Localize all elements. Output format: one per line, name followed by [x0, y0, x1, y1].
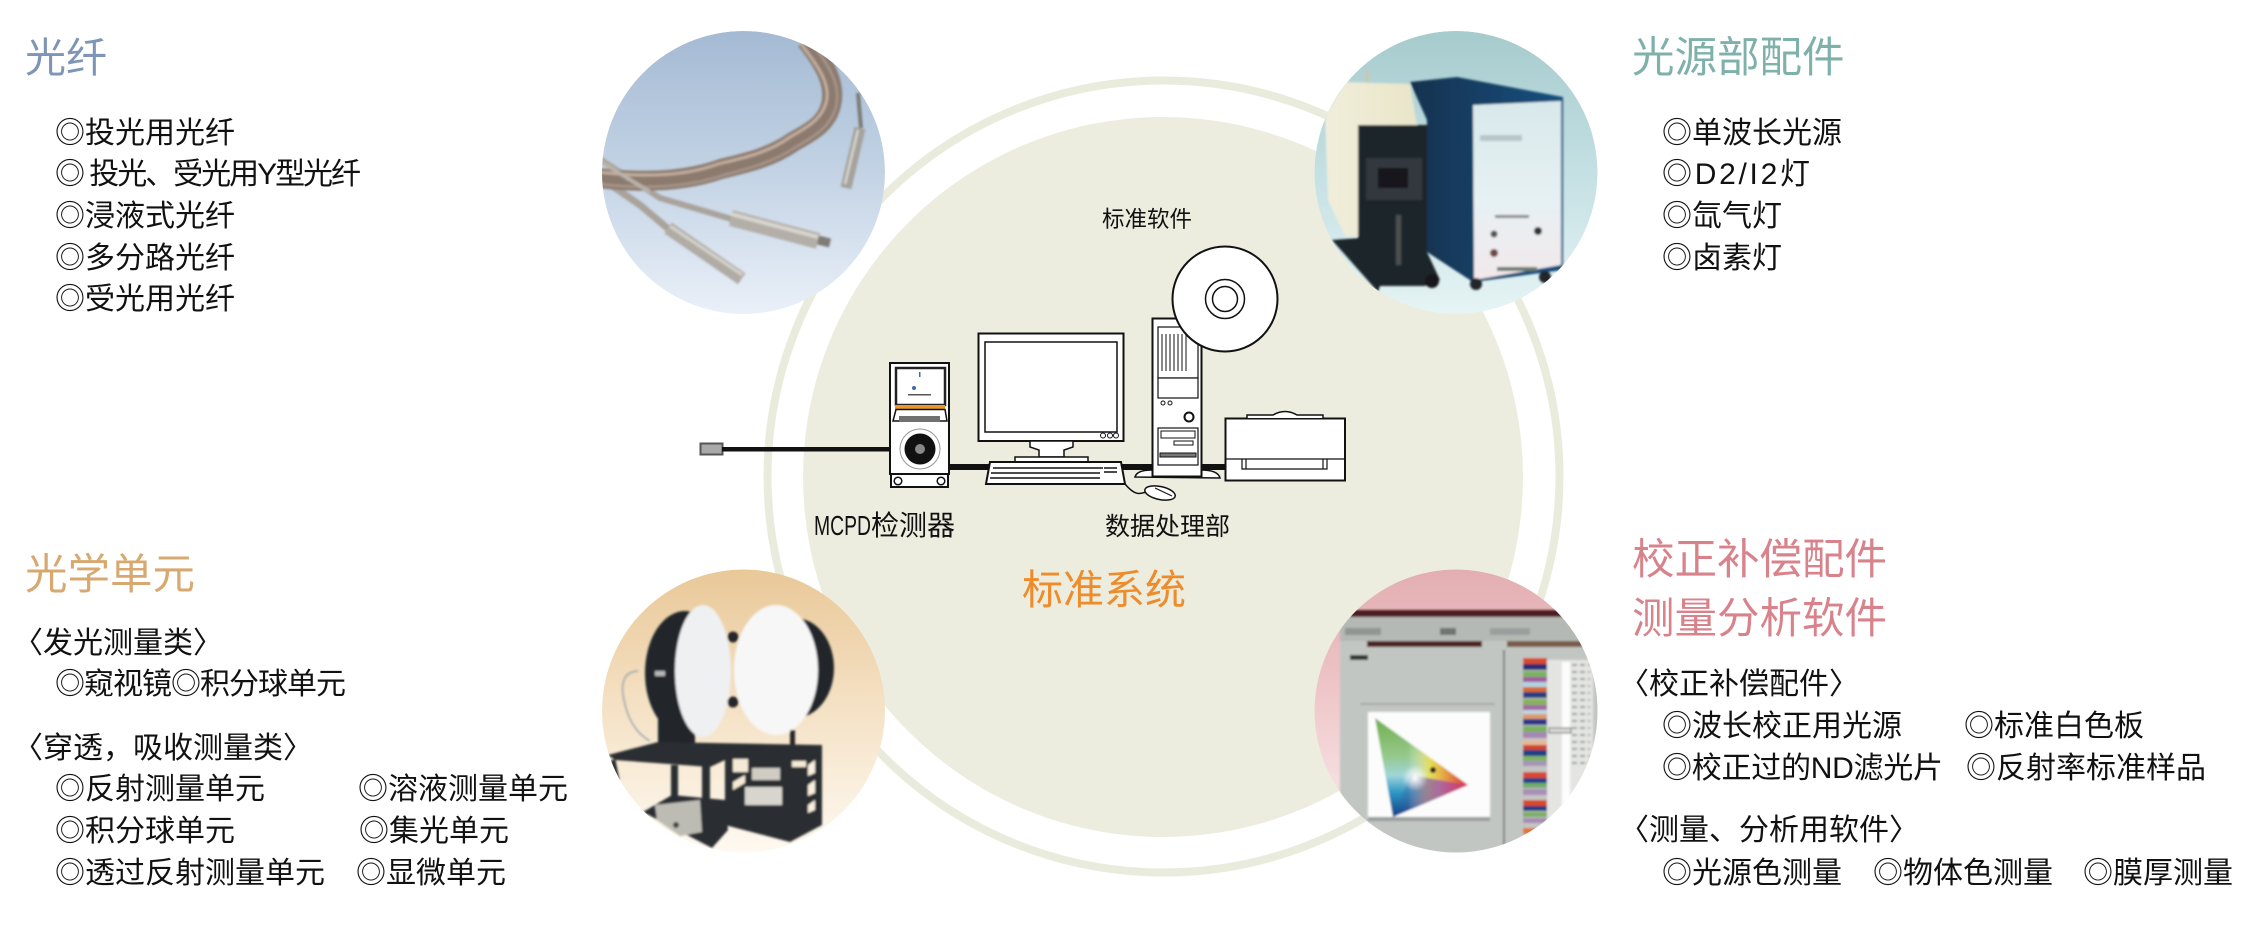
- list: transmission and absorption measurement: ◎反射测量单元: [55, 773, 265, 806]
- list: measurement and analysis software: ◎物体色测量: [1873, 857, 2053, 890]
- photo: light source unit: [1314, 31, 1598, 314]
- list: emission measurement: [13, 627, 346, 701]
- icon: computer tower: [1135, 318, 1220, 478]
- list: calibration accessories: ◎标准白色板: [1964, 710, 2144, 743]
- diagram: standard system equipment: [700, 246, 1345, 503]
- list: transmission and absorption measurement: [13, 732, 568, 890]
- panel: optical units: [13, 552, 568, 890]
- list: fiber types: [55, 117, 361, 316]
- icon: MCPD detector: [890, 363, 949, 487]
- cable: detector to computer: [949, 464, 1225, 470]
- panel: calibration accessories and analysis software: [1619, 537, 2233, 890]
- list: light sources: [1662, 117, 1842, 275]
- list: transmission and absorption measurement: ◎溶液测量单元: [358, 773, 568, 806]
- list: fiber types: ◎投光用光纤: [55, 117, 235, 150]
- list: measurement and analysis software: ◎光源色测量: [1662, 857, 1842, 890]
- list: calibration accessories: ◎校正过的ND滤光片: [1662, 752, 1943, 785]
- icon: monitor: [978, 334, 1124, 462]
- list: light sources: ◎单波长光源: [1662, 117, 1842, 150]
- icon: mouse: [1125, 483, 1177, 503]
- icon: keyboard: [986, 462, 1125, 484]
- list: light sources: ◎卤素灯: [1662, 242, 1782, 275]
- heading: optical units: 光学单元: [25, 552, 195, 599]
- label: MCPD detector: MCPD: [814, 510, 871, 541]
- list: calibration accessories: ◎波长校正用光源: [1662, 710, 1902, 743]
- list: calibration accessories: ◎反射率标准样品: [1966, 752, 2206, 785]
- panel: optical fiber list: [25, 35, 361, 316]
- list: emission measurement: ◎窥视镜◎积分球单元: [55, 668, 346, 701]
- list: transmission and absorption measurement: ◎透过反射测量单元: [55, 857, 325, 890]
- label: MCPD detector: [814, 510, 955, 541]
- icon: fiber plug and cable: [700, 444, 912, 454]
- photo: optical fibers: [598, 31, 885, 314]
- list: light sources: ◎D2/I2灯: [1662, 158, 1810, 191]
- central system disk: [803, 117, 1523, 837]
- heading: optical fiber: 光纤: [25, 35, 107, 81]
- label: data processing unit: 数据处理部: [1105, 513, 1230, 541]
- heading: light source accessories: 光源部配件: [1632, 35, 1845, 82]
- list: transmission and absorption measurement: ◎显微单元: [356, 857, 506, 890]
- list: measurement and analysis software: [1619, 814, 2233, 890]
- list: transmission and absorption measurement: ◎集光单元: [359, 815, 509, 848]
- list: fiber types: ◎浸液式光纤: [55, 200, 235, 233]
- list: fiber types: ◎受光用光纤: [55, 283, 235, 316]
- label: MCPD detector: 检测器: [871, 510, 955, 541]
- icon: software disc: [1172, 246, 1278, 352]
- list: calibration accessories: 〈校正补偿配件〉: [1619, 668, 1859, 701]
- photo: integrating sphere: [602, 570, 885, 852]
- heading: calibration accessories: 校正补偿配件: [1632, 537, 1887, 584]
- label: standard software: 标准软件: [1102, 207, 1192, 232]
- list: transmission and absorption measurement: ◎积分球单元: [55, 815, 235, 848]
- list: light sources: ◎氙气灯: [1662, 200, 1782, 233]
- label: standard system: 标准系统: [1022, 567, 1186, 613]
- outer ring: [768, 80, 1560, 872]
- list: fiber types: ◎ 投光、受光用Y型光纤: [55, 158, 361, 191]
- list: calibration accessories: [1619, 668, 2206, 785]
- list: fiber types: ◎多分路光纤: [55, 242, 235, 275]
- photo: software screenshot: [1314, 570, 1600, 855]
- list: measurement and analysis software: ◎膜厚测量: [2083, 857, 2233, 890]
- icon: printer: [1225, 412, 1345, 480]
- heading: measurement analysis software: 测量分析软件: [1632, 596, 1887, 643]
- list: emission measurement: 〈发光测量类〉: [13, 627, 223, 660]
- list: transmission and absorption measurement: 〈穿透，吸收测量类〉: [13, 732, 313, 765]
- panel: light source accessories: [1632, 35, 1845, 275]
- list: measurement and analysis software: 〈测量、分析用软件〉: [1619, 814, 1919, 847]
